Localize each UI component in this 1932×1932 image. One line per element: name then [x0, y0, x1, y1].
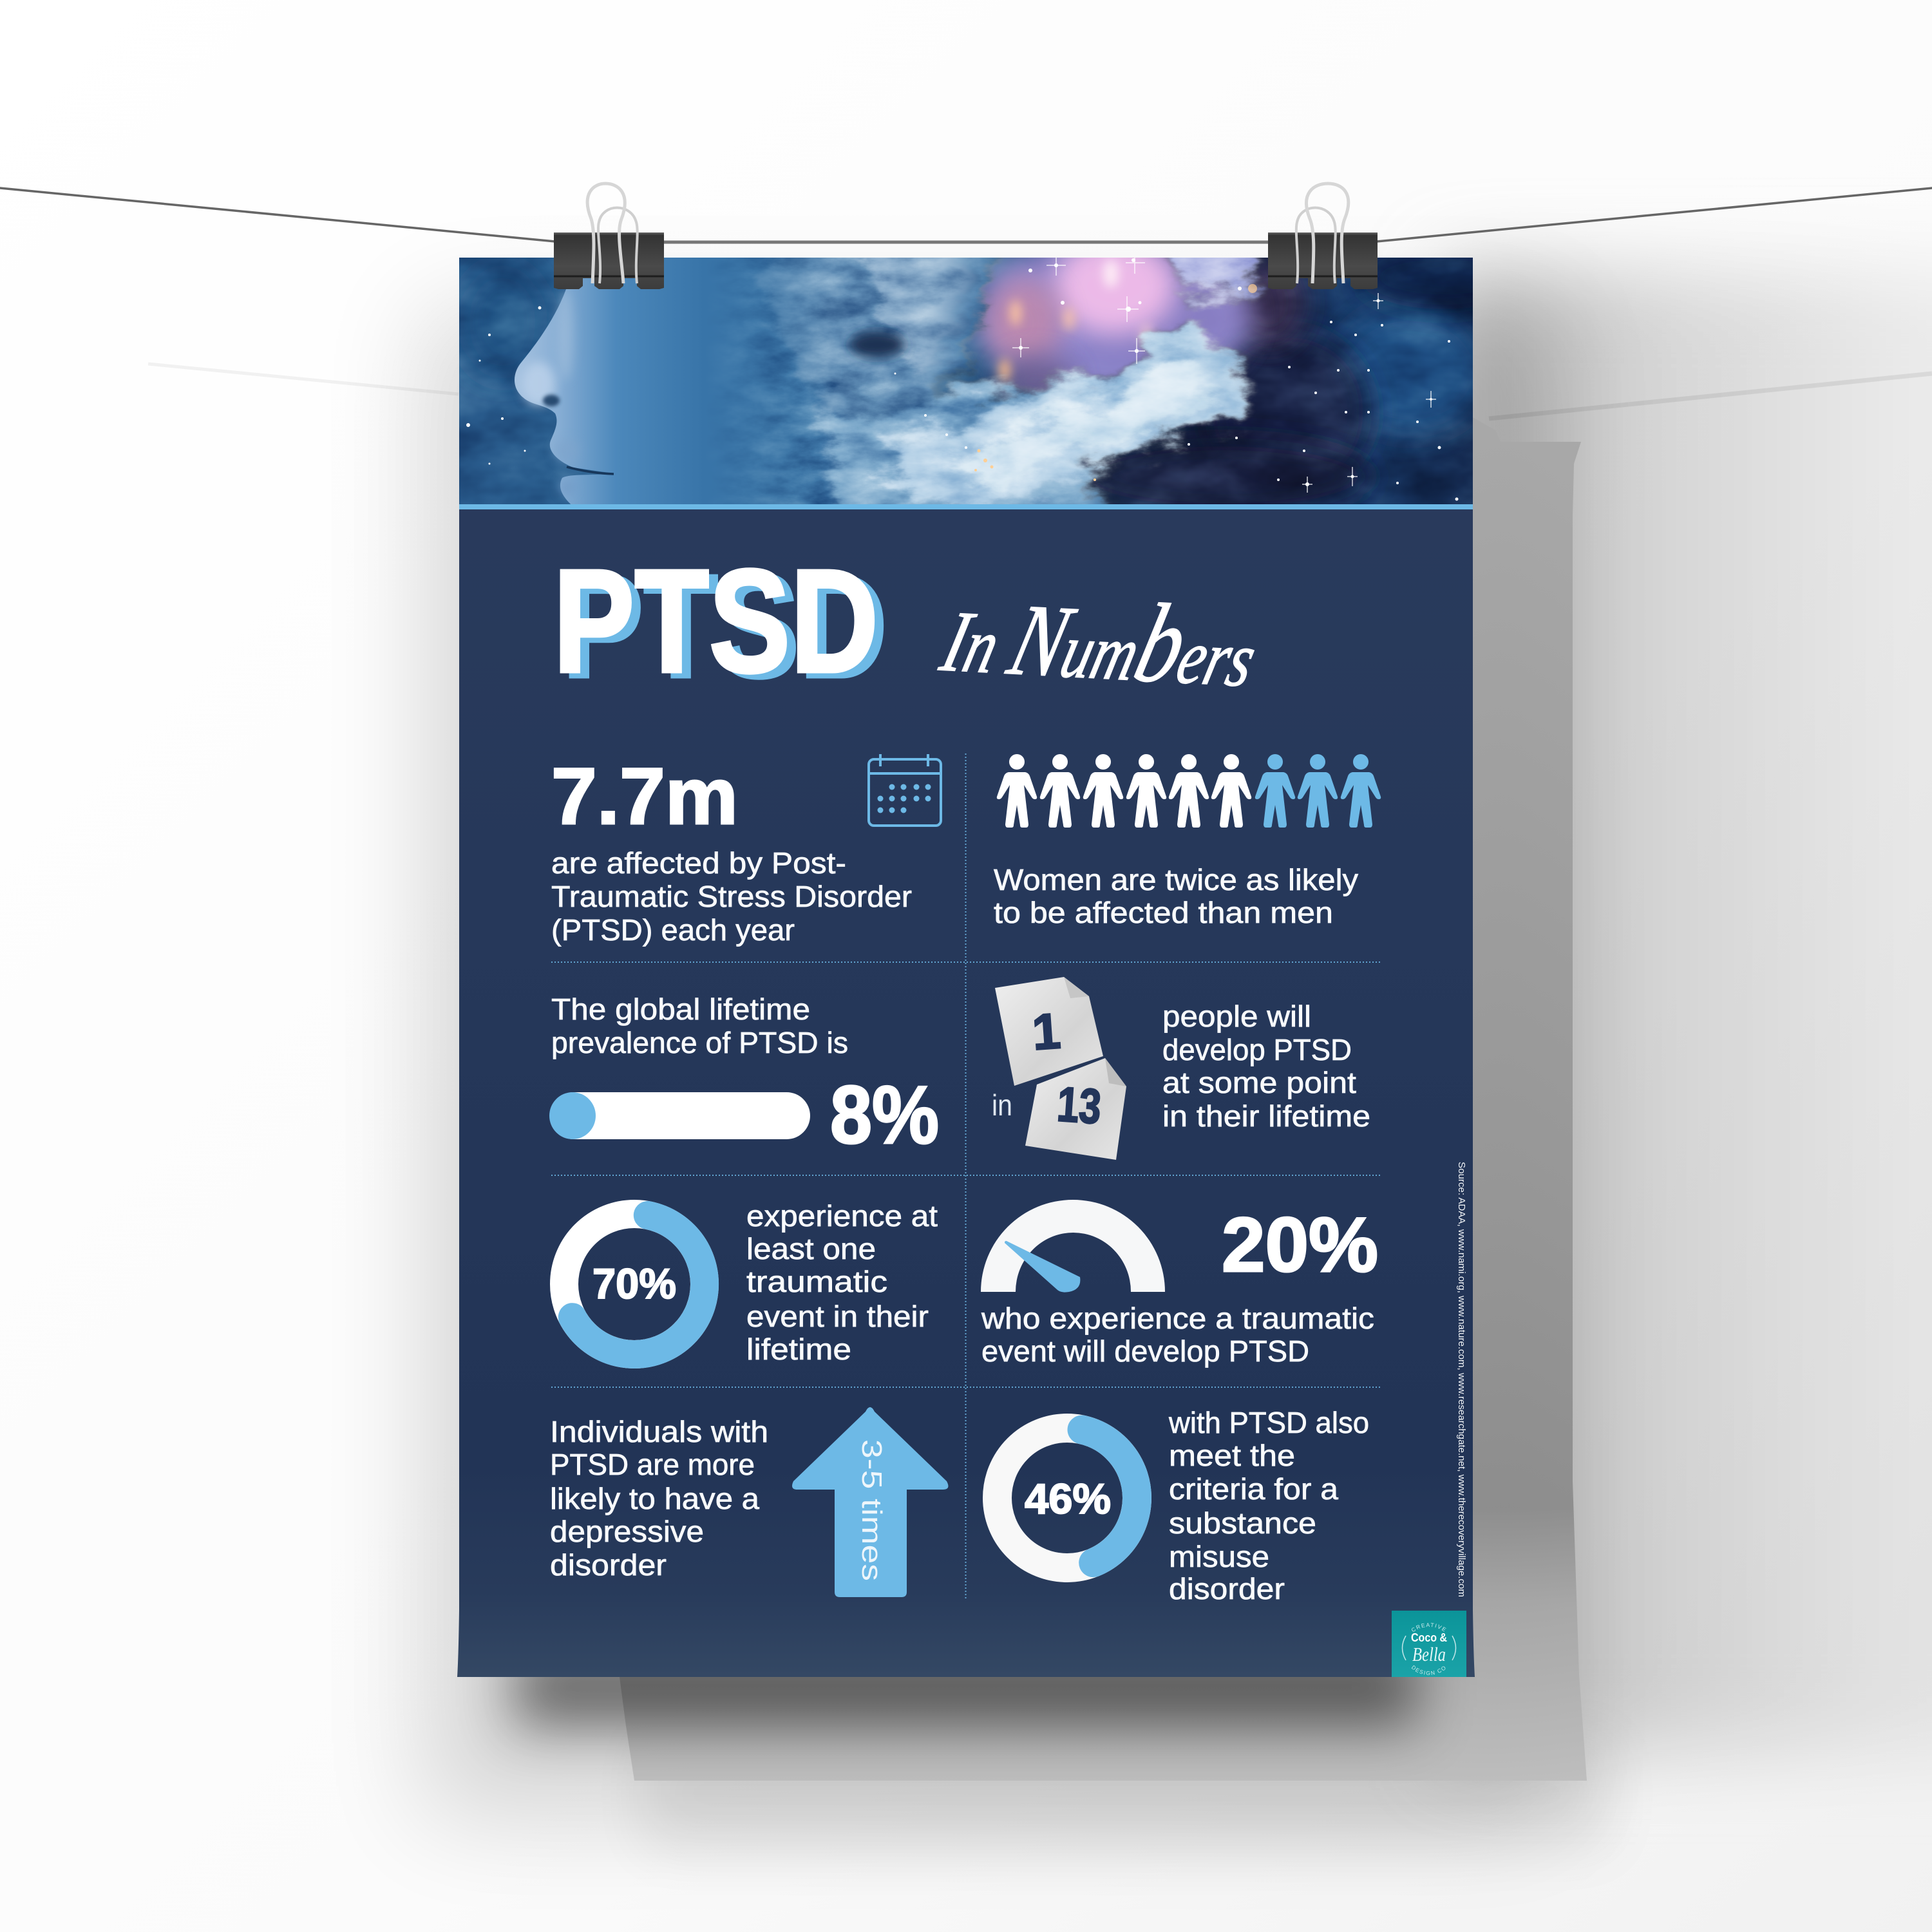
label: 70%: 70% [592, 1260, 676, 1307]
stat: 20% develop PTSD [981, 1200, 1378, 1368]
icon: row of people [997, 754, 1381, 828]
text: 46% description: meet the [1169, 1439, 1295, 1472]
icon: paper sheet 1: 1 [1030, 1002, 1062, 1061]
text: 46% description: with PTSD also [1168, 1406, 1369, 1439]
text: 1 in 13 description: people will [1162, 999, 1311, 1033]
arrow: up with 3-5 times [792, 1407, 948, 1597]
text: women description: Women are twice as likely [994, 863, 1358, 896]
icon: paper sheet 1 [995, 977, 1103, 1086]
header image: face dissolving into nebula [459, 258, 1473, 504]
text: 70% description: lifetime [746, 1332, 851, 1366]
number: 8%: 8% [830, 1069, 939, 1160]
text: 20% description [981, 1302, 1374, 1368]
text: 46% description: misuse [1169, 1540, 1269, 1573]
text: 70% description: event in their [746, 1300, 929, 1333]
text: depressive description: disorder [550, 1548, 667, 1582]
logo: Coco & Bella: Bella [1412, 1643, 1446, 1665]
text: affected description: Traumatic Stress Disorder [551, 880, 912, 913]
text: 70% description: least one [746, 1232, 876, 1265]
text: depressive description: Individuals with [550, 1415, 768, 1448]
text: prevalence description [551, 992, 848, 1059]
hanging wire [0, 188, 1932, 242]
text: depressive description: PTSD are more [550, 1448, 755, 1481]
stat: 1 in 13 [992, 977, 1370, 1160]
title: In Numbers: In Numbers [931, 571, 1273, 710]
chart: 46% donut [997, 1428, 1137, 1567]
logo: Coco & Bella [1392, 1611, 1466, 1677]
chart: 70% donut [564, 1214, 705, 1354]
stat: 70% traumatic event [564, 1199, 938, 1366]
stat: 3-5 times depressive disorder [550, 1407, 948, 1597]
dividers [551, 753, 1382, 1598]
text: 20% description: who experience a traumatic [981, 1302, 1374, 1335]
stat: 46% substance misuse [997, 1406, 1369, 1605]
text: 1 in 13 description: in their lifetime [1162, 1099, 1370, 1133]
icon: paper sheet 13 [1025, 1058, 1126, 1160]
stat: 8% lifetime prevalence [549, 992, 939, 1160]
text: 70% description: experience at [746, 1199, 938, 1233]
text: 46% description: disorder [1169, 1572, 1285, 1605]
progress bar [549, 1092, 810, 1139]
text: 1 in 13 description: develop PTSD [1162, 1033, 1352, 1066]
text: 70% description: traumatic [746, 1265, 887, 1298]
stat: 7.7m affected each year [551, 752, 941, 947]
binder clip: right [1268, 184, 1378, 289]
number: 20%: 20% [1222, 1202, 1378, 1288]
binder clip: left [554, 184, 664, 289]
text: prevalence description: prevalence of PTSD is [551, 1026, 848, 1059]
source note: Source: ADAA, www.nami.org, www.nature.com, www.researchgate.net, www.therecoveryvillage.com [1456, 1162, 1467, 1597]
text: 1 in 13 description [1162, 999, 1370, 1133]
text: 46% description [1168, 1406, 1369, 1605]
text: 46% description: criteria for a [1169, 1472, 1338, 1506]
wall shadows [148, 270, 1932, 1848]
stat: women twice as likely [994, 754, 1381, 929]
logo: Coco & Bella: CREATIVE [1412, 1623, 1446, 1632]
logo: Coco & Bella: DESIGN CO [1412, 1665, 1445, 1675]
icon: calendar [869, 754, 941, 826]
face silhouette [515, 245, 831, 509]
title: PTSD: PTSD [562, 545, 887, 708]
accent strip [459, 504, 1473, 509]
icon: paper sheet 13: 13 [1056, 1077, 1103, 1135]
text: affected description: are affected by Post- [551, 846, 846, 880]
text: women description: to be affected than men [994, 896, 1333, 929]
text: in: in [992, 1088, 1012, 1122]
text: depressive description [550, 1415, 768, 1582]
label: 3-5 times: 3-5 times [856, 1439, 887, 1581]
text: 70% description [746, 1199, 938, 1366]
label: 46%: 46% [1025, 1475, 1111, 1522]
text: 1 in 13 description: at some point [1162, 1066, 1356, 1099]
text: depressive description: depressive [550, 1515, 704, 1548]
text: 46% description: substance [1169, 1506, 1316, 1540]
text: affected description: (PTSD) each year [551, 913, 795, 947]
text: women description [994, 863, 1358, 929]
title: PTSD: PTSD [553, 540, 878, 703]
text: prevalence description: The global lifetime [551, 992, 810, 1026]
poster body [457, 258, 1475, 1677]
number: 7.7m: 7.7m [551, 752, 738, 841]
text: depressive description: likely to have a [550, 1482, 759, 1515]
text: affected description [551, 846, 912, 947]
chart: gauge [981, 1200, 1165, 1293]
text: 20% description: event will develop PTSD [981, 1334, 1309, 1368]
logo: Coco & Bella: Coco & [1411, 1631, 1447, 1644]
